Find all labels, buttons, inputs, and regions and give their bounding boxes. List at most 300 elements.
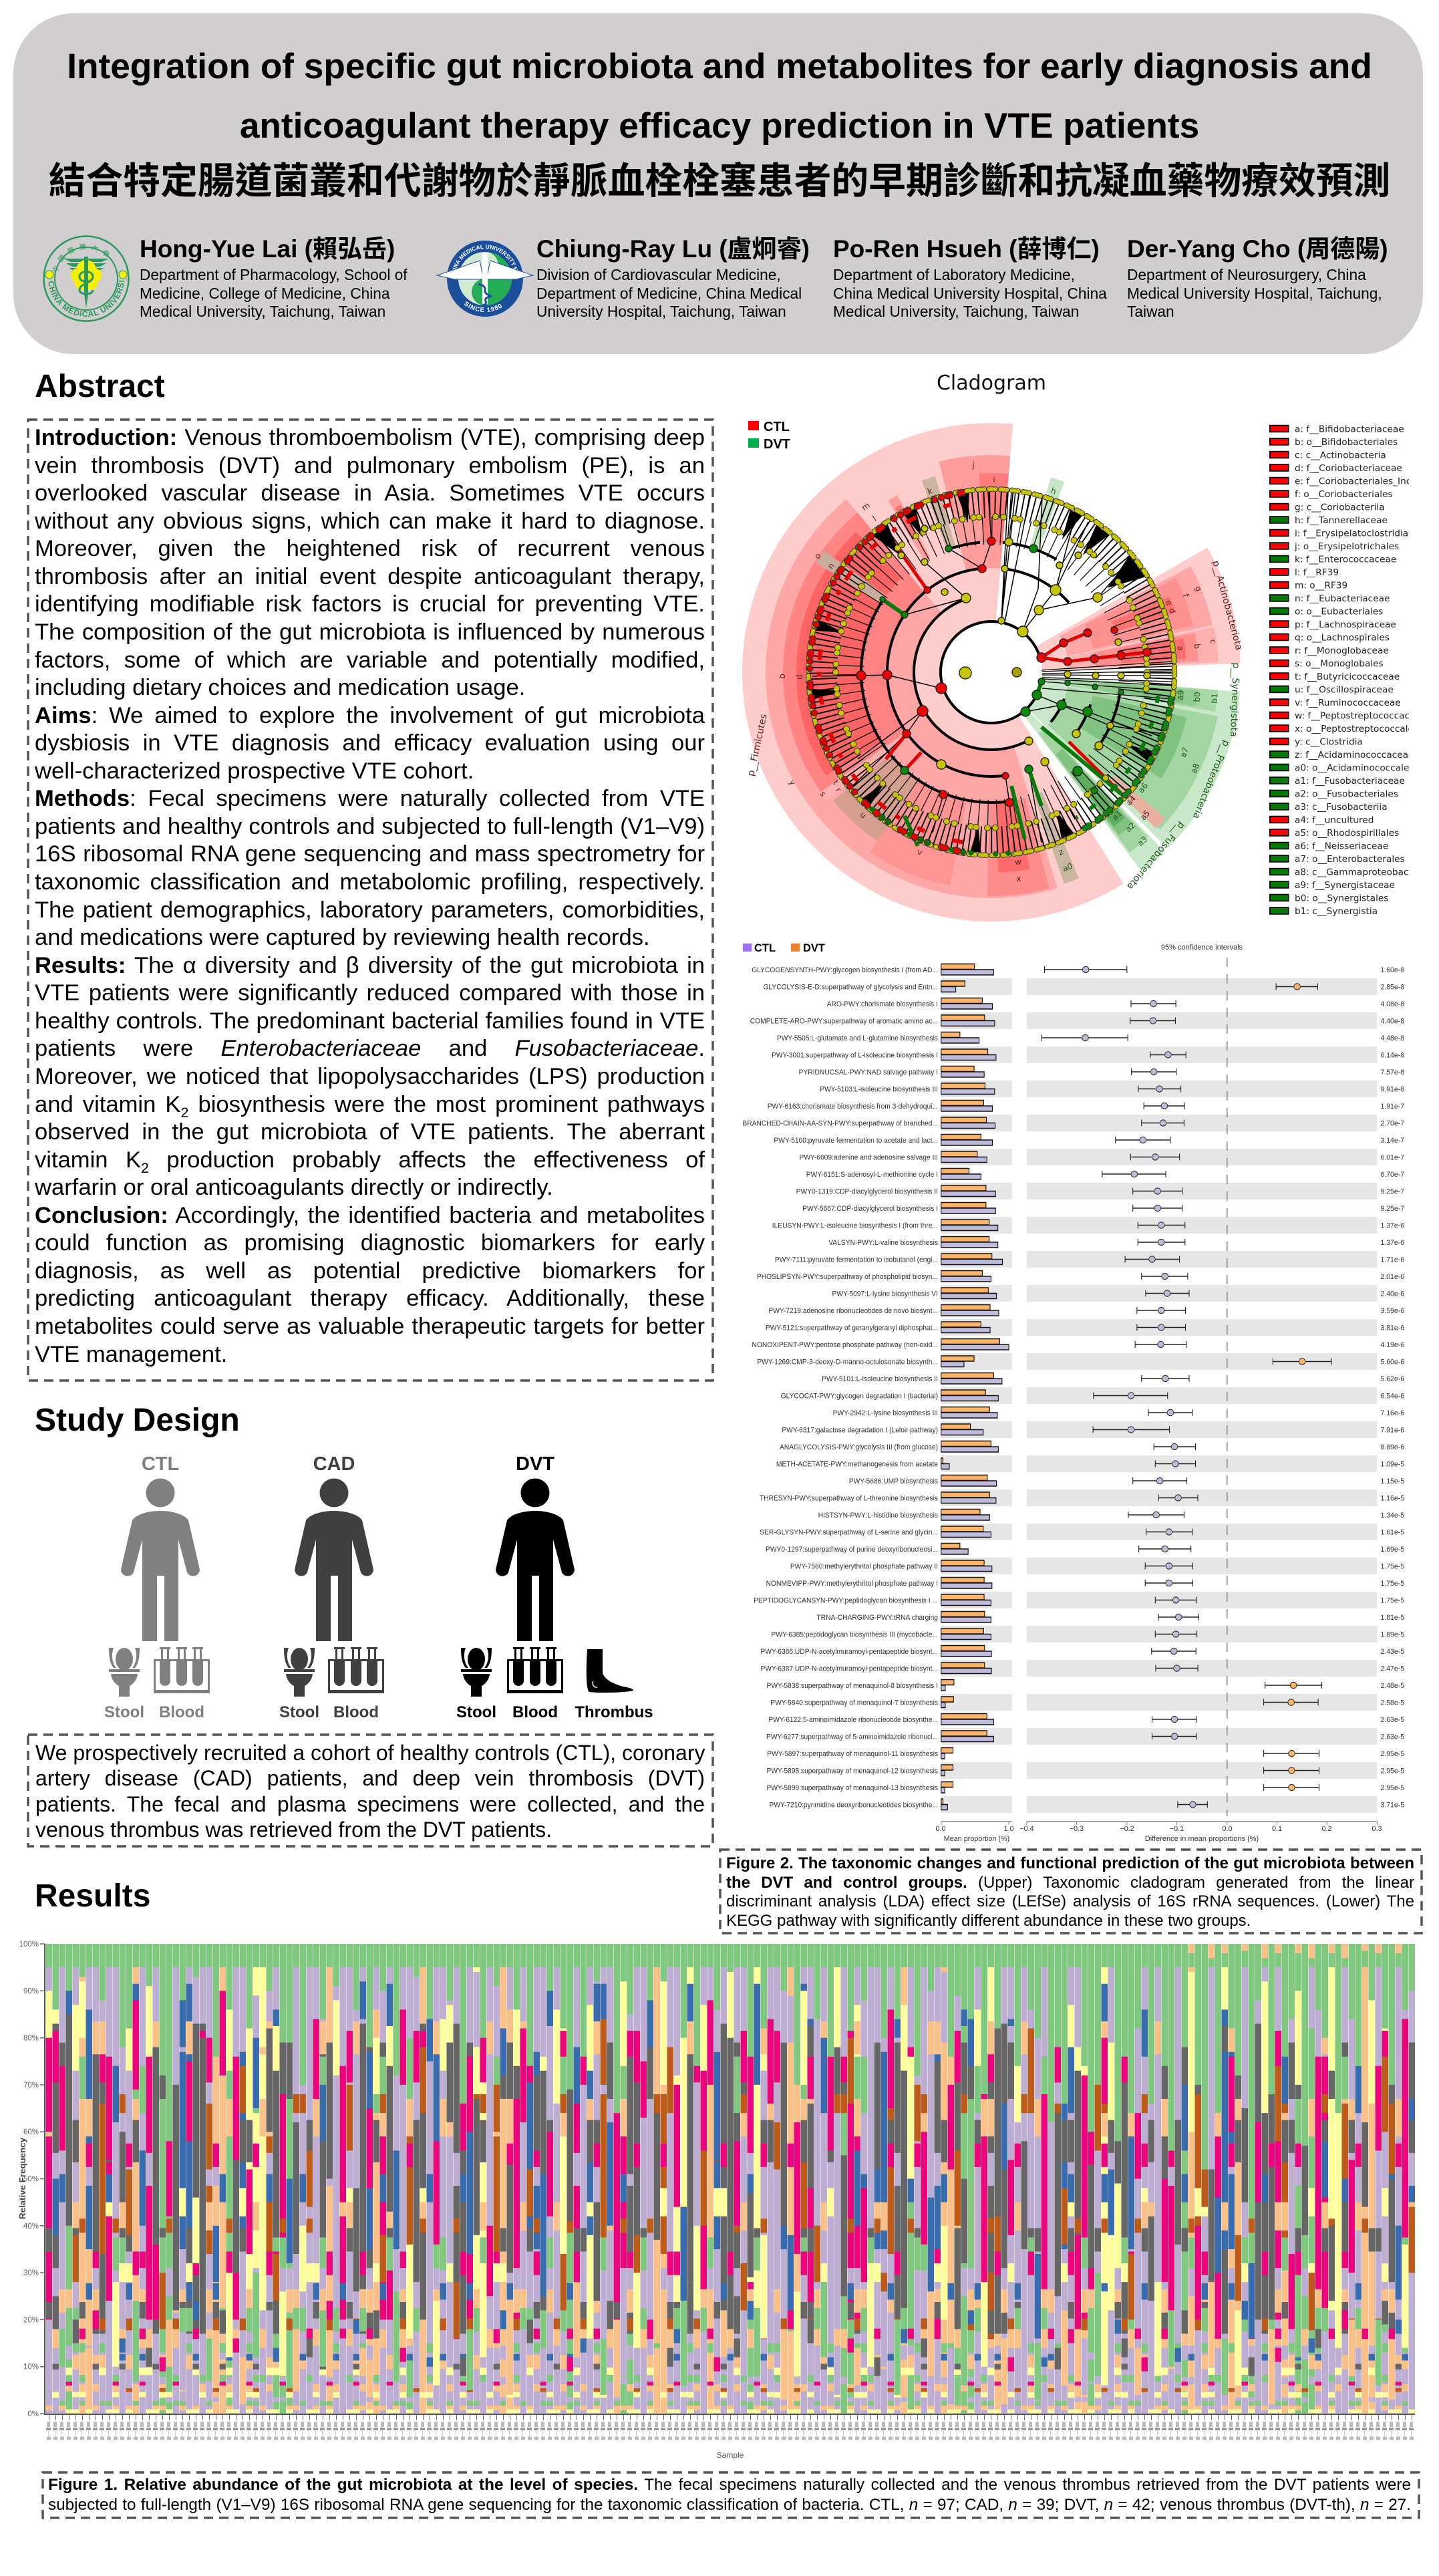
wedge labels: w	[1014, 857, 1022, 867]
panel: study design text: artery disease (CAD) patients, and deep vein thrombosis (DVT)	[35, 1766, 705, 1790]
p-values: 4.19e-6	[1381, 1341, 1404, 1349]
pathway labels: BRANCHED-CHAIN-AA-SYN-PWY:superpathway of branched...	[742, 1119, 938, 1128]
group: DVT: Thrombus	[575, 1703, 653, 1721]
author: Hong-Yue Lai: Hong-Yue Lai (賴弘岳)	[140, 235, 395, 263]
p-values: 1.37e-6	[1381, 1222, 1404, 1230]
pathway labels: PWY0-1297:superpathway of purine deoxyribonucleosi...	[766, 1546, 938, 1554]
p-values: 2.47e-5	[1381, 1665, 1404, 1673]
icon: China Medical University logo: 中國醫藥大學	[52, 243, 110, 272]
panel: figure 2 caption	[719, 1848, 1423, 1935]
axis tick labels: 100%	[19, 1941, 39, 1949]
pathway labels: PWY-5838:superpathway of menaquinol-8 biosynthesis I	[767, 1682, 938, 1690]
p-values: 9.91e-8	[1381, 1085, 1404, 1094]
group: CTL: Blood	[159, 1703, 204, 1721]
legend: cladogram taxa: g: c__Coriobacteriia	[1295, 503, 1385, 513]
legend: cladogram taxa: e: f__Coriobacteriales_Incertae	[1295, 476, 1435, 486]
panel: figure 2 caption: KEGG pathway with significantly different abundance in these two groups.	[726, 1912, 1251, 1930]
panel: abstract text: diagnosis, as well as potential predictive biomarkers for	[35, 1258, 705, 1284]
p-values: 1.89e-5	[1381, 1630, 1404, 1639]
panel: figure 2 caption: discriminant analysis (LDA) effect size (LEfSe) analysis of 16S rRNA sequences. (Lower) The	[726, 1892, 1414, 1910]
p-values: 9.25e-7	[1381, 1187, 1404, 1196]
wedge labels: p__Actinobacteriota	[1210, 559, 1244, 652]
p-values: 1.37e-6	[1381, 1239, 1404, 1247]
legend: cladogram taxa: b1: c__Synergistia	[1295, 906, 1378, 917]
axis tick labels: 30%	[23, 2269, 39, 2277]
wedge labels: a9	[1175, 690, 1186, 700]
heading: Results: Results	[35, 1878, 150, 1914]
p-values: 2.43e-5	[1381, 1648, 1404, 1656]
panel: figure 1 caption: Figure 1. Relative abundance of the gut microbiota at the level of species. The fecal specimens naturally collected and the venous thrombus retrieved from the DVT patients were	[48, 2476, 1411, 2494]
axis tick labels: 10%	[23, 2364, 39, 2372]
wedge labels: a0	[1062, 861, 1074, 873]
wedge labels: g	[1193, 585, 1204, 593]
icon: China Medical University Hospital logo: SINCE 1980	[464, 301, 502, 312]
mean markers: CTL	[1082, 966, 1196, 1808]
panel: abstract text: and medications were captured by reviewing health records.	[35, 925, 650, 950]
legend: cladogram taxa: a7: o__Enterobacterales	[1295, 854, 1405, 865]
chart: functional pathway extended error bars	[742, 942, 1404, 1843]
p-values: 7.91e-6	[1381, 1426, 1404, 1435]
pathway labels: PYRIDNUCSAL-PWY:NAD salvage pathway I	[799, 1068, 938, 1077]
pathway labels: PWY-6163:chorismate biosynthesis from 3-dehydroqui...	[768, 1103, 938, 1111]
panel: abstract text: overlooked vascular disease in Asia. Sometimes VTE occurs	[35, 480, 705, 506]
pathway labels: PWY-5097:L-lysine biosynthesis VI	[832, 1290, 938, 1298]
axis labels: −0.3	[1070, 1825, 1084, 1833]
axis tick labels: 60%	[23, 2128, 39, 2136]
panel: abstract text: observed in the gut microbiota of VTE patients. The aberrant	[35, 1119, 705, 1145]
panel: abstract text: The patient demographics, laboratory parameters, comorbidities,	[35, 897, 705, 923]
title: Cladogram: Cladogram	[937, 372, 1046, 395]
axis tick labels: 70%	[23, 2082, 39, 2090]
axis tick labels	[19, 1941, 39, 2418]
pathway labels: PWY-5100:pyruvate fermentation to acetate and lact...	[774, 1137, 938, 1145]
wedge labels: a5	[1138, 809, 1152, 822]
author: Der-Yang Cho: Der-Yang Cho (周德陽)	[1127, 235, 1388, 263]
p-values: 4.08e-8	[1381, 1000, 1404, 1008]
pathway labels: SER-GLYSYN-PWY:superpathway of L-serine and glycin...	[760, 1528, 938, 1537]
wedge labels: x	[1016, 874, 1021, 883]
text: CHINA MEDICAL UNIVERSITY HOSPITAL	[452, 245, 518, 279]
legend: CTL/DVT	[743, 942, 825, 954]
pathway labels: ILEUSYN-PWY:L-isoleucine biosynthesis I (from thre...	[772, 1222, 938, 1230]
axis labels: −0.2	[1120, 1825, 1134, 1833]
panel: figure 1 caption	[41, 2471, 1420, 2519]
pathway labels: PWY-6317:galactose degradation I (Leloir pathway)	[782, 1426, 938, 1435]
axis tick labels: 90%	[23, 1987, 39, 1995]
legend: cladogram taxa: h: f__Tannerellaceae	[1295, 515, 1388, 526]
group: DVT: Blood	[512, 1703, 558, 1721]
pathway labels: PWY-3001:superpathway of L-isoleucine biosynthesis I	[772, 1051, 938, 1060]
p-values: 3.14e-7	[1381, 1137, 1404, 1145]
pathway labels	[742, 966, 939, 1810]
author: Der-Yang Cho: Department of Neurosurgery, China	[1127, 266, 1366, 283]
p-values: 7.57e-8	[1381, 1068, 1404, 1077]
chart: stacked relative abundance bars	[17, 1941, 1415, 2460]
coloured connectors	[882, 526, 1147, 797]
axis labels: 0.3	[1372, 1825, 1382, 1833]
legend: cladogram taxa: w: f__Peptostreptococcaceae	[1295, 711, 1426, 722]
legend: cladogram taxa: m: o__RF39	[1295, 580, 1347, 591]
nodes	[856, 525, 1151, 807]
wedge labels: a3	[1136, 835, 1149, 848]
p-values: 2.85e-8	[1381, 983, 1404, 992]
irregular long segments	[49, 1944, 1412, 2404]
p-values: 5.60e-6	[1381, 1358, 1404, 1367]
legend: cladogram taxa: a1: f__Fusobacteriaceae	[1295, 776, 1405, 786]
pathway labels: NONMEVIPP-PWY:methylerythritol phosphate pathway I	[766, 1580, 938, 1588]
legend: cladogram taxa: a6: f__Neisseriaceae	[1295, 841, 1388, 851]
p-values: 8.89e-6	[1381, 1443, 1404, 1451]
wedge labels: b1	[1209, 693, 1220, 704]
axis labels: 95% confidence intervals	[1161, 944, 1243, 952]
wedge labels: p__Proteobacteria	[1190, 738, 1232, 821]
author: Chiung-Ray Lu: University Hospital, Taichung, Taiwan	[536, 303, 786, 320]
group: CTL: CTL	[142, 1453, 179, 1475]
p-values: 5.62e-6	[1381, 1375, 1404, 1383]
panel: abstract text: predicting anticoagulant therapy efficacy. Additionally, these	[35, 1286, 705, 1311]
p-values: 1.60e-8	[1381, 966, 1404, 974]
pathway labels: PWY-2942:L-lysine biosynthesis III	[833, 1409, 938, 1417]
panel: study design text: patients. The fecal and plasma specimens were collected, and the	[35, 1792, 705, 1816]
group: CAD	[279, 1453, 384, 1721]
legend: cladogram taxa: a4: f__uncultured	[1295, 815, 1374, 826]
group: CAD: Blood	[333, 1703, 379, 1721]
pathway labels: PWY-1269:CMP-3-deoxy-D-manno-octulosonate biosynth...	[757, 1358, 938, 1367]
p-values: 6.01e-7	[1381, 1153, 1404, 1162]
panel: abstract text: Moreover, given the heightened risk of recurrent venous	[35, 536, 705, 561]
panel: figure 2 caption: the DVT and control groups. (Upper) Taxonomic cladogram generated from the linear	[726, 1874, 1414, 1892]
panel: abstract text: Methods: Fecal specimens were naturally collected from VTE	[35, 786, 705, 811]
p-values: 1.81e-5	[1381, 1614, 1404, 1622]
pathway labels: THRESYN-PWY:superpathway of L-threonine biosynthesis	[760, 1494, 939, 1503]
leaf node rings	[808, 489, 1174, 855]
panel: abstract text: taxonomic classification and metabolomic profiling, respectively.	[35, 869, 705, 895]
wedge labels: l	[871, 514, 878, 523]
legend: cladogram taxa: z: f__Acidaminococcaceae	[1295, 750, 1414, 760]
group: CTL	[104, 1453, 210, 1721]
panel: abstract text: vitamin K2 production probably affects the effectiveness of	[35, 1147, 705, 1176]
wedge labels: c	[1209, 639, 1218, 644]
y axis title: Relative Frequency	[17, 2137, 27, 2219]
group: CAD: Stool	[279, 1703, 319, 1721]
author: Hong-Yue Lai: Medicine, College of Medicine, China	[140, 285, 390, 302]
panel: abstract text: well-characterized prospective VTE cohort.	[35, 758, 474, 784]
legend: cladogram taxa: y: c__Clostridia	[1295, 736, 1363, 747]
pathway labels: PWY-7560:methylerythritol phosphate pathway II	[790, 1562, 938, 1571]
pathway labels: PWY-7219:adenosine ribonucleotides de novo biosynt...	[768, 1307, 938, 1315]
axis tick labels: 80%	[23, 2035, 39, 2043]
author: Po-Ren Hsueh: Medical University, Taichung, Taiwan	[833, 303, 1079, 320]
p-values: 1.75e-5	[1381, 1580, 1404, 1588]
short irregular stripes in lower chart	[62, 2273, 1378, 2400]
p-values: 2.40e-6	[1381, 1290, 1404, 1298]
pathway labels: HISTSYN-PWY:L-histidine biosynthesis	[818, 1512, 939, 1520]
panel: abstract text: dysbiosis in VTE diagnosis and efficacy evaluation using our	[35, 730, 705, 756]
wedge labels: d	[1167, 607, 1178, 615]
author: Hong-Yue Lai: Department of Pharmacology, School of	[140, 266, 408, 283]
panel: abstract text: VTE patients were significantly reduced compared with those in	[35, 980, 705, 1006]
group: CAD: CAD	[313, 1453, 355, 1475]
pathway labels: PWY-5899:superpathway of menaquinol-13 biosynthesis	[767, 1784, 939, 1792]
p-values: 9.25e-7	[1381, 1205, 1404, 1213]
wedge labels: e	[1164, 599, 1174, 607]
wedge labels: a	[1176, 645, 1185, 652]
pathway labels: NONOXIPENT-PWY:pentose phosphate pathway (non-oxid...	[752, 1341, 938, 1349]
wedge labels: u	[858, 810, 868, 821]
panel: abstract text: identifying modifiable risk factors is crucial for preventing VTE.	[35, 591, 705, 617]
wedge labels: b	[1192, 643, 1202, 650]
wedge labels: v	[916, 847, 924, 857]
p-values: 4.48e-8	[1381, 1034, 1404, 1042]
pathway labels: PWY-7210:pyrimidine deoxyribonucleotides biosynthe...	[770, 1801, 938, 1810]
wedge labels: o	[812, 551, 823, 561]
pathway labels: PWY-5101:L-isoleucine biosynthesis II	[822, 1375, 938, 1383]
p-values: 2.70e-7	[1381, 1119, 1404, 1128]
panel: abstract text: warfarin or oral anticoagulants directly or indirectly.	[35, 1175, 553, 1200]
pathway labels: PHOSLIPSYN-PWY:superpathway of phospholipid biosyn...	[757, 1273, 938, 1281]
legend: cladogram taxa: v: f__Ruminococcaceae	[1295, 698, 1401, 708]
pathway labels: METH-ACETATE-PWY:methanogenesis from acetate	[776, 1460, 938, 1469]
panel: abstract text: vein thrombosis (DVT) and pulmonary embolism (PE), is an	[35, 453, 705, 478]
wedge labels: h	[1050, 486, 1058, 496]
pathway labels: PWY-6277:superpathway of 5-aminoimidazole ribonucl...	[766, 1733, 938, 1741]
legend: cladogram taxa: r: f__Monoglobaceae	[1295, 646, 1389, 656]
pathway labels: ANAGLYCOLYSIS-PWY:glycolysis III (from glucose)	[780, 1443, 938, 1451]
triangles	[812, 493, 1153, 853]
legend: cladogram taxa: a: f__Bifidobacteriaceae	[1295, 424, 1404, 434]
p-values: 3.59e-6	[1381, 1307, 1404, 1315]
panel: abstract text: metabolites could serve as valuable therapeutic targets for better	[35, 1314, 705, 1339]
pathway labels: PWY-5667:CDP-diacylglycerol biosynthesis I	[802, 1205, 938, 1213]
axis labels: −0.4	[1019, 1825, 1034, 1833]
pathway labels: PWY0-1319:CDP-diacylglycerol biosynthesis II	[796, 1187, 938, 1196]
p-values: 1.91e-7	[1381, 1103, 1404, 1111]
panel: abstract text: 16S ribosomal RNA gene sequencing and mass spectrometry for	[35, 841, 705, 867]
panel: abstract text: VTE management.	[35, 1342, 227, 1367]
wedge labels: k	[926, 486, 934, 496]
thick arcs	[824, 505, 1158, 839]
legend: cladogram taxa: d: f__Coriobacteriaceae	[1295, 463, 1402, 474]
bars: CTL mean proportion	[941, 970, 1009, 1810]
legend: cladogram taxa: q: o__Lachnospirales	[1295, 632, 1390, 643]
p-values: 1.75e-5	[1381, 1562, 1404, 1571]
wedge labels: a8	[1189, 762, 1201, 775]
panel: abstract text: could function as promising diagnostic biomarkers for early	[35, 1230, 705, 1256]
wedge labels: s	[818, 789, 828, 799]
p-values: 1.69e-5	[1381, 1546, 1404, 1554]
author: Po-Ren Hsueh: China Medical University Hospital, China	[833, 285, 1107, 302]
group: DVT	[456, 1453, 653, 1721]
wedge labels	[746, 460, 1244, 891]
panel: abstract text: Results: The α diversity and β diversity of the gut microbiota in	[35, 953, 705, 978]
wedge labels: a6	[1136, 781, 1150, 795]
top green	[661, 1944, 799, 1967]
legend: cladogram taxa: i: f__Erysipelatoclostridiaceae	[1295, 528, 1430, 539]
legend: CTL/DVT: DVT	[803, 942, 825, 954]
pathway labels: PWY-6386:UDP-N-acetylmuramoyl-pentapeptide biosynt...	[760, 1648, 938, 1656]
panel: abstract text: Moreover, we noticed that lipopolysaccharides (LPS) production	[35, 1064, 705, 1089]
p-values: 2.01e-6	[1381, 1273, 1404, 1281]
wedge labels: p__Fusobacteriota	[1124, 820, 1187, 891]
legend: cladogram taxa: f: o__Coriobacteriales	[1295, 489, 1393, 500]
pathway labels: PWY-6387:UDP-N-acetylmuramoyl-pentapeptide biosynt...	[760, 1665, 938, 1673]
p-values: 1.09e-5	[1381, 1460, 1404, 1469]
title: Chinese line: 結合特定腸道菌叢和代謝物於靜脈血栓栓塞患者的早期診斷和抗凝血藥物療效預測	[49, 160, 1390, 202]
panel: abstract text: including dietary choices and medication usage.	[35, 675, 525, 700]
legend: CTL/DVT: DVT	[764, 437, 790, 452]
axis labels: −0.1	[1170, 1825, 1184, 1833]
wedge labels: p	[796, 674, 805, 680]
panel: abstract text: Introduction: Venous thromboembolism (VTE), comprising deep	[35, 425, 705, 450]
axis labels: 0.1	[1272, 1825, 1282, 1833]
heading: Abstract: Abstract	[35, 369, 165, 404]
panel: figure 1 caption: subjected to full-length (V1–V9) 16S ribosomal RNA gene sequencing for the taxonomic classification of bacteria. CTL, n = 97; CAD, n = 39; DVT, n = 42; venous thrombus (DVT-th), n = 27.	[48, 2496, 1411, 2514]
author: Chiung-Ray Lu: Division of Cardiovascular Medicine,	[536, 266, 781, 283]
axes	[941, 1822, 1377, 1825]
wedge labels: r	[834, 786, 843, 794]
figure: cladogram	[742, 372, 1244, 922]
legend: CTL/DVT: CTL	[764, 420, 790, 434]
axis tick labels: 20%	[23, 2316, 39, 2324]
pathway labels: PWY-5505:L-glutamate and L-glutamine biosynthesis	[777, 1034, 939, 1042]
group: DVT: Stool	[456, 1703, 496, 1721]
legend: cladogram taxa: l: f__RF39	[1295, 567, 1339, 578]
p-values: 3.71e-5	[1381, 1801, 1404, 1810]
panel: abstract text	[27, 418, 714, 1382]
p-values: 7.16e-6	[1381, 1409, 1404, 1417]
column gaps	[45, 1944, 1415, 2414]
spokes	[823, 504, 1160, 841]
axis labels	[935, 944, 1382, 1843]
pathway labels: PWY-7111:pyruvate fermentation to isobutanol (engi...	[775, 1256, 938, 1264]
pathway labels: PWY-5840:superpathway of menaquinol-7 biosynthesis	[770, 1699, 939, 1707]
legend: cladogram taxa: a2: o__Fusobacteriales	[1295, 789, 1398, 799]
axis labels: 1.0	[1003, 1825, 1014, 1833]
panel: study design text: venous thrombus was retrieved from the DVT patients.	[35, 1818, 552, 1842]
wedge labels: j	[971, 460, 975, 470]
p-values: 2.63e-5	[1381, 1716, 1404, 1724]
author: Der-Yang Cho: Medical University Hospital, Taichung,	[1127, 285, 1382, 302]
legend: cladogram taxa: p: f__Lachnospiraceae	[1295, 619, 1396, 630]
axis labels: 0.2	[1321, 1825, 1332, 1833]
legend: cladogram taxa: a5: o__Rhodospirillales	[1295, 828, 1399, 839]
axis labels: Mean proportion (%)	[944, 1835, 1009, 1843]
pathway labels: TRNA-CHARGING-PWY:tRNA charging	[816, 1614, 938, 1622]
confidence intervals	[1042, 966, 1331, 1808]
author: Chiung-Ray Lu: Department of Medicine, China Medical	[536, 285, 802, 302]
p-values: 1.15e-5	[1381, 1477, 1404, 1485]
wedge labels: n	[826, 561, 836, 571]
p-values: 2.95e-5	[1381, 1767, 1404, 1775]
pathway labels: GLYCOGENSYNTH-PWY:glycogen biosynthesis I (from AD...	[752, 966, 938, 974]
title: English line 2: anticoagulant therapy efficacy prediction in VTE patients	[240, 106, 1199, 146]
pathway labels: PWY-5121:superpathway of geranylgeranyl diphosphat...	[766, 1324, 938, 1332]
pathway labels: PWY-6385:peptidoglycan biosynthesis III (mycobacte...	[771, 1630, 938, 1639]
group: CTL: Stool	[104, 1703, 144, 1721]
author: Hong-Yue Lai: Medical University, Taichung, Taiwan	[140, 303, 385, 320]
p-values: 6.70e-7	[1381, 1171, 1404, 1179]
legend: cladogram taxa: a8: c__Gammaproteobacteria	[1295, 867, 1430, 878]
axes and ticks	[45, 1944, 1415, 2414]
group: DVT: DVT	[516, 1453, 554, 1475]
p-values: 2.58e-5	[1381, 1699, 1404, 1707]
pathway labels: PWY-6609:adenine and adenosine salvage III	[799, 1153, 938, 1162]
legend: cladogram taxa: s: o__Monoglobales	[1295, 659, 1384, 670]
heading: Study Design: Study Design	[35, 1403, 240, 1438]
author: Der-Yang Cho	[1127, 235, 1388, 320]
pathway labels: ARO-PWY:chorismate biosynthesis I	[827, 1000, 938, 1008]
wedge labels: m	[860, 500, 872, 513]
axis tick labels: 50%	[23, 2176, 39, 2184]
p-values: 6.54e-6	[1381, 1392, 1404, 1401]
p-values: 4.40e-8	[1381, 1017, 1404, 1026]
author: Po-Ren Hsueh: Po-Ren Hsueh (薛博仁)	[833, 235, 1100, 263]
pathway labels: PWY-6122:5-aminoimidazole ribonucleotide biosynthe...	[768, 1716, 938, 1724]
legend: cladogram taxa: t: f__Butyricicoccaceae	[1295, 672, 1400, 682]
p-values: 1.34e-5	[1381, 1512, 1404, 1520]
p-values: 1.16e-5	[1381, 1494, 1404, 1503]
legend: cladogram taxa	[1269, 425, 1409, 916]
pathway labels: PWY-5898:superpathway of menaquinol-12 biosynthesis	[767, 1767, 939, 1775]
p-values: 1.71e-6	[1381, 1256, 1404, 1264]
legend: cladogram taxa: a9: f__Synergistaceae	[1295, 880, 1395, 891]
wedge labels: p__Synergistota	[1228, 662, 1241, 737]
panel: abstract text: healthy controls. The predominant bacterial families found in VTE	[35, 1008, 705, 1034]
pathway labels: PWY-5897:superpathway of menaquinol-11 biosynthesis	[767, 1750, 939, 1758]
wedge labels: a7	[1178, 746, 1190, 759]
panel: abstract text: Aims: We aimed to explore the involvement of gut microbiota	[35, 703, 705, 728]
axis tick labels: 0%	[27, 2410, 39, 2418]
wedge labels: y	[787, 778, 798, 787]
wedge labels: p__Firmicutes	[746, 713, 770, 777]
p-values: 2.63e-5	[1381, 1733, 1404, 1741]
chart: cladogram circle	[742, 423, 1241, 922]
panel: abstract text: patients were Enterobacteriaceae and Fusobacteriaceae.	[35, 1036, 705, 1061]
wedge labels: z	[1058, 847, 1064, 857]
panel: figure 2 caption: Figure 2. The taxonomic changes and functional prediction of the gut microbiota between	[726, 1854, 1414, 1872]
pathway labels: PWY-6151:S-adenosyl-L-methionine cycle I	[806, 1171, 938, 1179]
legend: cladogram taxa: k: f__Enterococcaceae	[1295, 555, 1396, 565]
author: Po-Ren Hsueh: Department of Laboratory Medicine,	[833, 266, 1075, 283]
panel: study design text	[27, 1733, 714, 1848]
pathway labels: VALSYN-PWY:L-valine biosynthesis	[828, 1239, 939, 1247]
bars: DVT mean proportion	[941, 964, 999, 1804]
full column base	[45, 2145, 1415, 2212]
panel: abstract text: and vitamin K2 biosynthesis were the most prominent pathways	[35, 1092, 705, 1120]
p-values: 3.81e-6	[1381, 1324, 1404, 1332]
legend: cladogram taxa: a3: c__Fusobacteriia	[1295, 802, 1388, 813]
legend: CTL/DVT	[748, 420, 790, 452]
x axis title: Sample	[717, 2450, 744, 2460]
mid chopping bands	[45, 2067, 1415, 2075]
pathway labels: PEPTIDOGLYCANSYN-PWY:peptidoglycan biosynthesis I ...	[754, 1596, 938, 1605]
wedge labels: f	[1181, 593, 1191, 599]
legend: cladogram taxa: c: c__Actinobacteria	[1295, 450, 1386, 461]
pathway labels: PWY-5103:L-isoleucine biosynthesis III	[820, 1085, 938, 1094]
author: Chiung-Ray Lu: Chiung-Ray Lu (盧炯睿)	[536, 235, 810, 263]
p-values: 2.48e-5	[1381, 1682, 1404, 1690]
author: Der-Yang Cho: Taiwan	[1127, 303, 1174, 320]
legend: cladogram taxa: b: o__Bifidobacteriales	[1295, 437, 1398, 448]
wedge labels: b0	[1192, 692, 1203, 702]
author: Chiung-Ray Lu	[536, 235, 810, 320]
figure: study design cohorts	[104, 1453, 653, 1721]
pathway labels: GLYCOLYSIS-E-D:superpathway of glycolysis and Entn...	[763, 983, 938, 992]
wedge labels: a2	[1124, 821, 1137, 834]
legend: cladogram taxa: j: o__Erysipelotrichales	[1294, 541, 1399, 552]
icon: China Medical University Hospital logo	[436, 241, 534, 317]
legend: cladogram taxa: b0: o__Synergistales	[1295, 893, 1388, 903]
